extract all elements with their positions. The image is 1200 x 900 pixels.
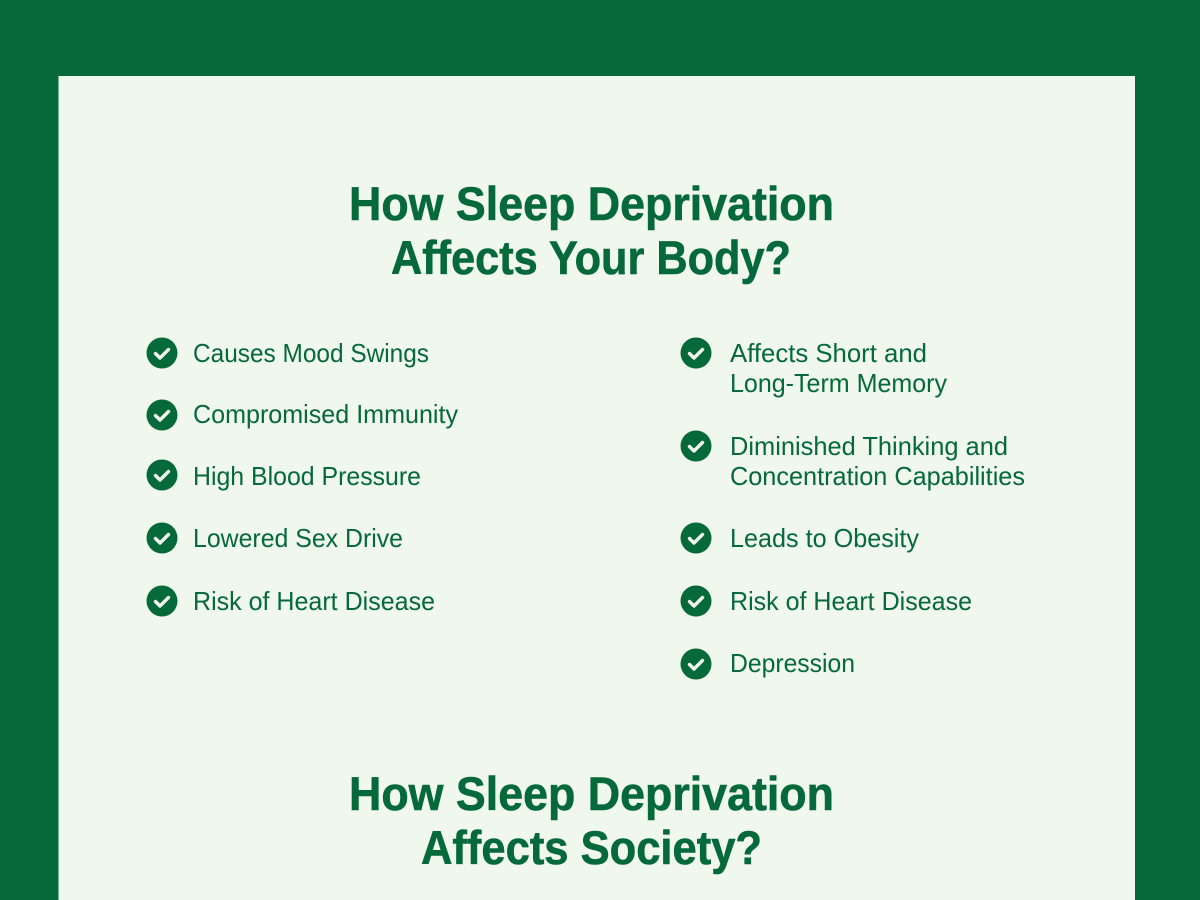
item: leads to obesity: Leads to Obesity [730,523,919,553]
heading: affects society: Affects Society? [421,821,762,874]
item: diminished thinking: Concentration Capabilities [730,461,1025,491]
heading: affects your body: Affects Your Body? [391,231,791,284]
item: risk of heart disease: Risk of Heart Disease [193,586,435,616]
list: right column [680,338,1025,680]
item: affects memory: Long-Term Memory [730,368,947,398]
item: compromised immunity: Compromised Immunity [193,399,458,429]
heading: affects society [349,767,834,874]
heading: affects your body: How Sleep Deprivation [349,177,834,230]
item: high blood pressure: High Blood Pressure [193,461,421,491]
item: affects memory [680,338,947,398]
heading: affects society: How Sleep Deprivation [349,767,834,820]
heading: affects your body [349,177,834,284]
item: diminished thinking: Diminished Thinking and [730,431,1008,461]
item: depression: Depression [730,648,855,678]
item: diminished thinking [680,430,1025,491]
item: causes mood swings: Causes Mood Swings [193,338,429,368]
item: risk of heart disease: Risk of Heart Disease [730,586,972,616]
item: depression [680,648,855,680]
item: lowered sex drive: Lowered Sex Drive [193,523,403,553]
item: affects memory: Affects Short and [730,338,927,368]
list: left column [146,338,458,616]
